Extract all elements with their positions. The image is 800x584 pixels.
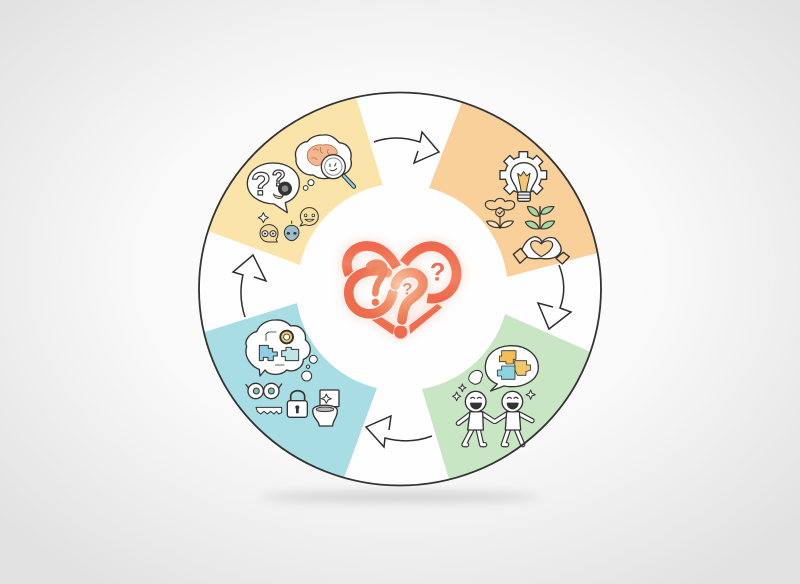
arrow: bottom, green to blue [366,416,432,447]
arrow: left, blue to yellow [233,255,266,317]
circle outline [199,92,601,486]
icons: lightbulb gear, plants and heart hands [485,152,569,264]
central heart with question marks: ? [430,259,445,287]
circle base [199,92,601,486]
icons: puzzle thought cloud, glasses, key, lock and toilet [246,320,339,426]
ground shadow [260,492,540,502]
panel: blue segment [204,303,377,478]
arrow: top, yellow to orange [374,132,439,163]
icons: questions, brain and faces: ? [272,165,286,191]
panel: orange segment [429,102,598,277]
panel: yellow segment [208,97,383,265]
icons: questions, brain and faces [247,135,354,242]
icons: questions, brain and faces: ? [251,165,271,202]
arrow: right, orange to green [538,265,571,329]
icons: two laughing friends with puzzle speech bubble [453,346,538,445]
central heart with question marks [346,246,456,339]
central heart with question marks: ? [402,279,412,298]
panel: green segment [422,314,590,479]
